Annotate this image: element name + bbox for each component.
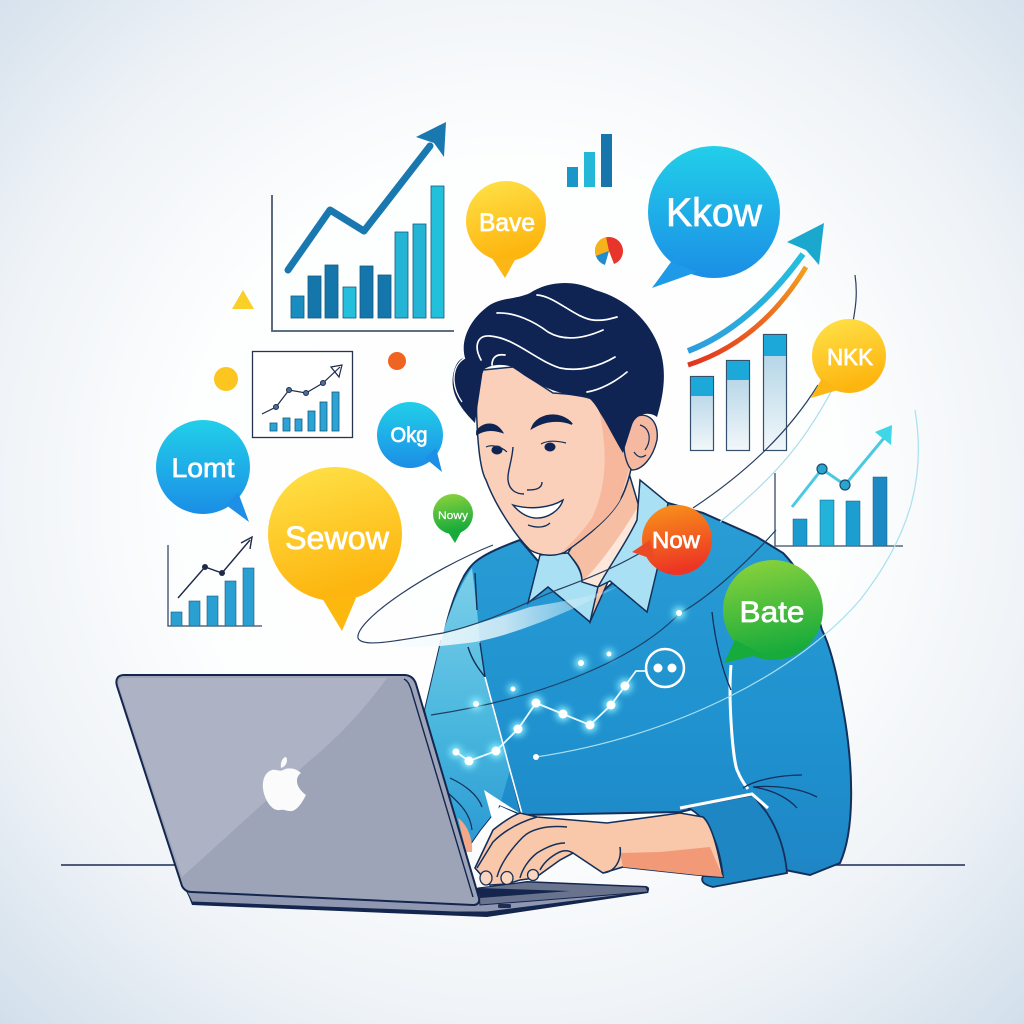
arm seams <box>468 573 521 814</box>
chart: framed small chart <box>252 352 352 438</box>
chart: lower-left small chart <box>168 537 262 626</box>
laptop <box>116 675 649 917</box>
laptop lid <box>116 675 479 905</box>
finger lines <box>477 817 620 878</box>
person <box>425 283 851 887</box>
face shadow <box>560 400 633 553</box>
lid light reflection <box>119 678 387 877</box>
right side seam <box>730 665 748 789</box>
sweater torso and sleeves <box>425 503 851 875</box>
hair <box>453 283 664 453</box>
speech bubble: Lomt <box>156 420 250 522</box>
speech bubble: Now <box>632 505 712 575</box>
eyes <box>492 446 502 454</box>
speech bubble: Now: Now <box>652 527 700 553</box>
chart: right small chart <box>775 425 903 546</box>
apple-like logo <box>263 757 306 811</box>
left hand behind lid <box>458 818 472 852</box>
speech bubble: NKK <box>811 319 886 398</box>
chart: large rising bar chart <box>272 122 454 331</box>
speech bubble: Nowy: Nowy <box>438 510 469 522</box>
table line <box>61 864 965 866</box>
gap between arm and torso <box>484 790 521 830</box>
lid right edge <box>404 679 473 897</box>
ear <box>624 415 657 470</box>
sleeve cuff <box>687 795 787 887</box>
nose <box>508 447 542 494</box>
hair highlights <box>477 295 627 392</box>
speech bubble: Bave: Bave <box>479 209 535 237</box>
chart: right rising curved arrows with bars <box>688 223 824 450</box>
speech bubble: Bate: Bate <box>740 596 804 629</box>
speech bubble: Bate <box>723 560 823 663</box>
translucent swoosh band <box>358 570 650 647</box>
laptop base <box>187 881 649 917</box>
icon: yellow dot <box>214 367 238 391</box>
speech bubble: Okg <box>377 402 443 472</box>
mouth <box>513 500 563 518</box>
icon: yellow triangle <box>232 290 254 309</box>
chart: small top bars <box>567 134 612 187</box>
speech bubble: Kkow <box>648 146 780 288</box>
glowing data line <box>450 607 685 768</box>
forearm and hand skin <box>475 813 723 885</box>
speech bubble: Nowy <box>433 494 473 543</box>
speech bubble: Sewow <box>268 467 402 631</box>
face <box>477 367 633 555</box>
speech bubble: Okg: Okg <box>390 424 428 447</box>
thin orbit lines <box>358 275 918 757</box>
neck <box>568 470 640 622</box>
speech bubble: NKK: NKK <box>827 344 874 370</box>
icon: pie chart <box>595 237 623 265</box>
icon: orange dot <box>388 352 406 370</box>
speech bubble: Lomt: Lomt <box>172 453 235 483</box>
eyebrows <box>477 415 572 434</box>
lighter left arm <box>425 568 510 850</box>
speech bubble: Bave <box>466 181 546 278</box>
speech bubble: Sewow: Sewow <box>285 520 390 556</box>
collar <box>528 480 668 622</box>
forearm shading <box>620 847 723 877</box>
speech bubble: Kkow: Kkow <box>666 191 762 235</box>
